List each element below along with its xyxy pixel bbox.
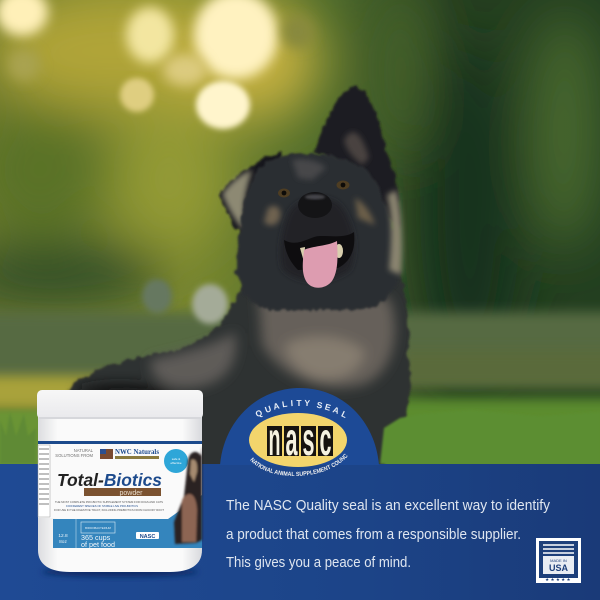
seal top text: Q: [254, 407, 264, 419]
left ear fringe: [222, 170, 252, 232]
label top stripe: [38, 441, 202, 444]
label description: 9 DIFFERENT SPECIES OF STABLE LIVE PRO-BIOTICS: [66, 504, 138, 508]
badge circle: [164, 449, 188, 473]
description text: a product that comes from a responsible supplier.: [226, 527, 521, 543]
servings text: [81, 533, 115, 549]
product jar: [37, 390, 203, 572]
dog muzzle: [280, 198, 355, 281]
brand line: NATURAL: [74, 448, 94, 453]
meadow: [0, 312, 600, 478]
seal top text: T: [296, 398, 302, 408]
net weight box: 12.8: [58, 533, 68, 539]
seal top text: Y: [304, 398, 311, 408]
seal top text: L: [340, 409, 349, 420]
servings text: 365 cups: [81, 533, 111, 542]
description text: This gives you a peace of mind.: [226, 555, 411, 571]
icon: made in USA badge: MADE IN: [550, 558, 567, 563]
badge circle: effective: [170, 461, 182, 465]
jar lid: [37, 390, 203, 419]
nasc letter blocks: s: [302, 413, 314, 465]
label description: [54, 500, 164, 512]
dog head: [237, 153, 398, 310]
seal bottom text: NATIONAL ANIMAL SUPPLEMENT COUNCIL: [250, 454, 348, 476]
NASC quality seal: [249, 398, 349, 476]
net weight box: [53, 519, 76, 548]
description text: [226, 498, 551, 571]
nasc letter blocks: [267, 413, 333, 465]
seal bottom text: [250, 454, 348, 476]
dog nose: [298, 192, 332, 218]
label white: [38, 444, 202, 518]
net weight box: 8oz: [59, 539, 67, 545]
description text: The NASC Quality seal is an excellent way to identify: [226, 498, 551, 514]
probiotic strength box: BIFIDOBACTERIUM: [85, 526, 112, 530]
seal top text: E: [324, 402, 332, 413]
nasc letter blocks: c: [320, 413, 332, 465]
icon: made in USA badge: [536, 538, 581, 583]
seal oval: [249, 413, 347, 467]
supplement facts panel: [38, 445, 50, 517]
servings text: of pet food: [81, 540, 115, 549]
head markings: [264, 159, 402, 275]
dog right ear: [314, 87, 400, 228]
lid rim: [39, 417, 201, 419]
seal top text: I: [290, 398, 293, 408]
dog on label: [174, 446, 202, 544]
label blue panel: [53, 495, 202, 548]
NASC mini logo: NASC: [140, 534, 155, 540]
seal top text: S: [316, 400, 324, 411]
dog coat shading: [78, 281, 395, 404]
NASC mini logo: [136, 532, 159, 540]
probiotic strength box: [81, 522, 115, 533]
nasc letter blocks: a: [286, 413, 298, 465]
brand line: SOLUTIONS FROM: [55, 453, 93, 458]
blue band: [0, 464, 600, 600]
powder bar: powder: [120, 490, 143, 497]
badge circle: safe &: [172, 457, 180, 461]
seal top text: [254, 398, 349, 420]
jar body: [38, 416, 202, 572]
dog body: [60, 240, 410, 470]
bokeh lights: [0, 0, 314, 324]
product name: Total-Biotics: [57, 470, 162, 490]
dog tongue: [303, 241, 337, 288]
brand line: [55, 448, 159, 459]
label description: THE MOST COMPLETE PRO-BIOTIC SUPPLEMENT SYSTEM FOR DOGS AND CATS: [55, 500, 163, 504]
seal top text: A: [272, 400, 280, 412]
seal top text: L: [281, 399, 288, 409]
dog left ear: [220, 152, 282, 244]
dog: [60, 87, 410, 470]
foreground grass: [0, 410, 600, 464]
dog ear inner: [344, 132, 369, 165]
label description: FOR USE IN THE DIGESTIVE TRACT, INCLUDING PREBIOTICS FROM CHICORY ROOT: [54, 508, 164, 512]
dog eyes: [278, 180, 350, 198]
seal top text: U: [263, 403, 273, 415]
icon: made in USA badge: USA: [549, 563, 568, 573]
powder bar: [84, 488, 161, 497]
dog teeth: [300, 244, 343, 262]
seal top text: A: [331, 404, 341, 416]
seal arch: [220, 388, 379, 465]
dog mouth: [284, 232, 354, 270]
icon: made in USA badge: ★★★★★: [545, 577, 572, 583]
brand line: NWC Naturals: [115, 448, 159, 456]
nasc letter blocks: n: [268, 413, 280, 465]
jar shadow: [42, 567, 198, 577]
